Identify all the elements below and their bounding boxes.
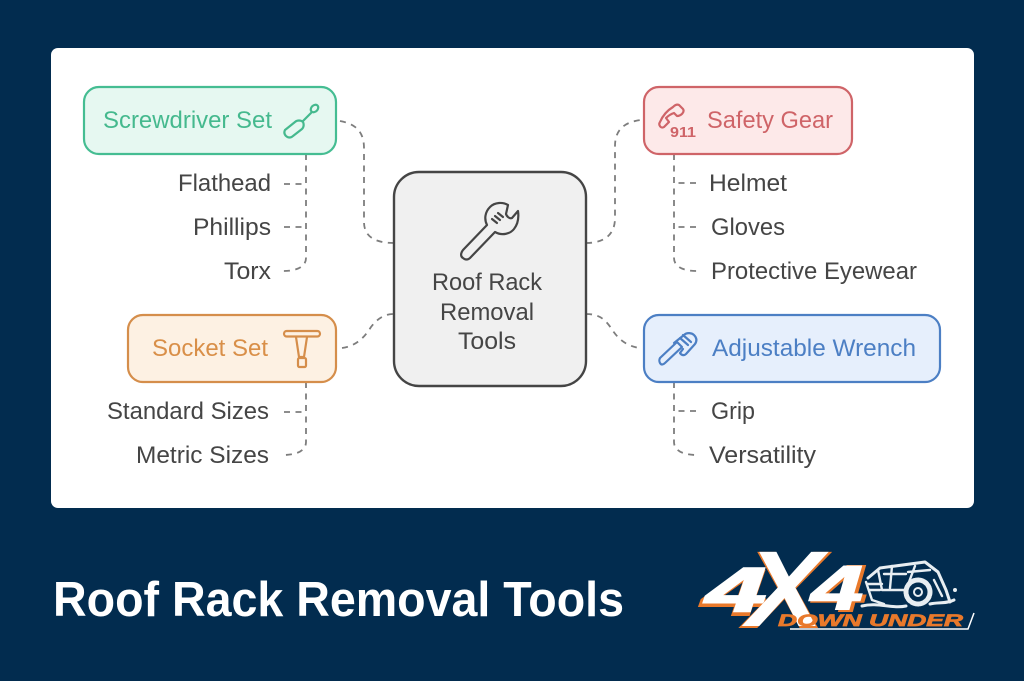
panel: socket set node <box>128 315 336 382</box>
title: Roof Rack Removal Tools <box>53 573 624 627</box>
list: socket set items: Standard Sizes <box>107 398 269 425</box>
logo tagline: DOWN UNDER <box>778 611 964 630</box>
panel: white diagram card <box>51 48 974 508</box>
panel: central node <box>394 172 586 386</box>
panel: screwdriver set node <box>84 87 336 154</box>
central node label <box>432 269 543 355</box>
logo wordmark: 4X4: 4 <box>698 557 766 629</box>
central node label: Roof Rack <box>432 269 543 296</box>
list: safety gear items: Helmet <box>709 170 787 197</box>
logo wordmark: 4X4 <box>698 528 867 652</box>
list: screwdriver set items: Phillips <box>193 214 271 241</box>
connectors: dashed lines between nodes <box>283 120 697 455</box>
icon: wrench <box>461 203 518 260</box>
list: adjustable wrench items: Versatility <box>709 442 816 469</box>
list: screwdriver set items: Torx <box>224 258 271 285</box>
logo illustration: off-road vehicle <box>862 562 956 607</box>
panel: adjustable wrench node <box>644 315 940 382</box>
heading: screwdriver set: Screwdriver Set <box>103 107 272 134</box>
list: socket set items: Metric Sizes <box>136 442 269 469</box>
logo wordmark: 4X4: 4 <box>703 556 766 625</box>
list: safety gear items: Gloves <box>711 214 785 241</box>
list: safety gear items <box>709 170 917 285</box>
list: safety gear items: Protective Eyewear <box>711 258 917 285</box>
central node label: Removal <box>440 299 534 326</box>
logo wordmark: 4X4: 4 <box>810 551 867 625</box>
list: screwdriver set items: Flathead <box>178 170 271 197</box>
logo: 4X4 Down Under <box>698 528 974 652</box>
logo wordmark: 4X4: X <box>742 528 829 649</box>
list: adjustable wrench items: Grip <box>711 398 755 425</box>
list: adjustable wrench items <box>709 398 816 469</box>
logo wordmark: 4X4: 4 <box>808 554 863 623</box>
icon: pipe wrench <box>659 333 696 364</box>
icon: screwdriver <box>284 103 320 138</box>
icon: emergency phone 911: 911 <box>670 125 696 141</box>
logo underline swoosh <box>790 613 974 629</box>
panel: safety gear node <box>644 87 852 154</box>
icon: emergency phone 911 <box>659 105 696 141</box>
central node label: Tools <box>458 328 516 355</box>
heading: socket set: Socket Set <box>152 335 268 362</box>
icon: t-handle socket wrench <box>284 331 320 367</box>
heading: adjustable wrench: Adjustable Wrench <box>712 335 916 362</box>
list: screwdriver set items <box>178 170 271 285</box>
logo wordmark: 4X4: X <box>737 529 832 652</box>
list: socket set items <box>107 398 269 469</box>
heading: safety gear: Safety Gear <box>707 107 833 134</box>
